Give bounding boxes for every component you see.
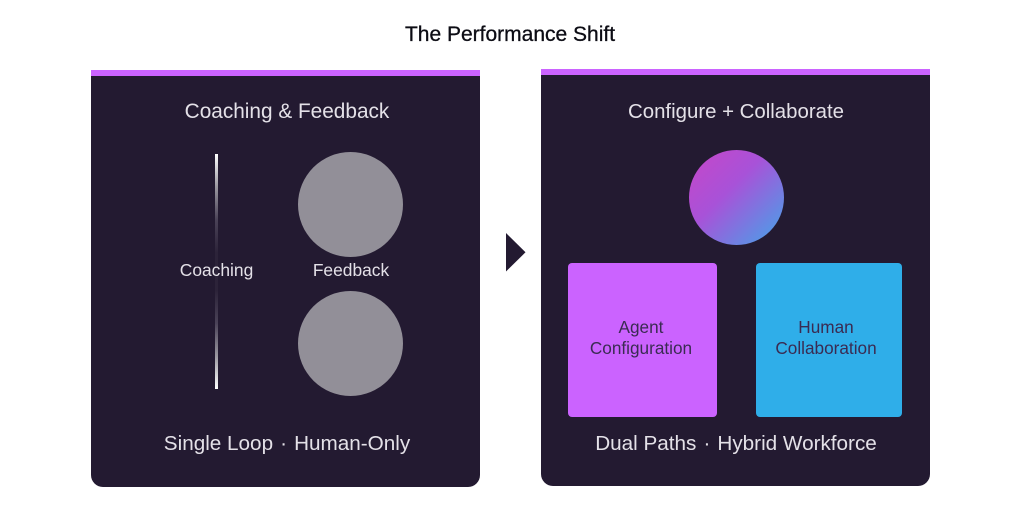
box label xyxy=(590,317,692,358)
coaching label: Coaching xyxy=(180,260,253,280)
box: agent configuration xyxy=(568,263,717,417)
panel heading: Configure + Collaborate xyxy=(628,101,844,123)
panel footer: Single Loop Human-Only xyxy=(164,432,410,455)
panel accent bar xyxy=(541,69,930,75)
feedback circle top xyxy=(298,152,402,257)
panel: coaching and feedback xyxy=(91,70,480,487)
feedback circle bottom xyxy=(298,291,402,396)
panel heading: Coaching & Feedback xyxy=(185,100,389,123)
box label: Human xyxy=(798,317,854,337)
box label: Configuration xyxy=(590,338,692,358)
title: The Performance Shift xyxy=(405,23,615,46)
panel footer: · xyxy=(280,432,287,455)
box: human collaboration xyxy=(756,263,902,417)
panel footer: · xyxy=(703,432,710,455)
panel footer: Dual Paths Hybrid Workforce xyxy=(595,432,877,455)
box label: Collaboration xyxy=(775,338,877,358)
gradient circle xyxy=(688,150,784,245)
feedback label: Feedback xyxy=(313,260,389,280)
coaching vertical line xyxy=(215,154,218,389)
box label: Agent xyxy=(619,317,663,337)
panel accent bar xyxy=(91,70,480,76)
box label xyxy=(775,317,877,358)
arrow xyxy=(506,233,526,272)
panel: configure and collaborate xyxy=(541,69,930,486)
